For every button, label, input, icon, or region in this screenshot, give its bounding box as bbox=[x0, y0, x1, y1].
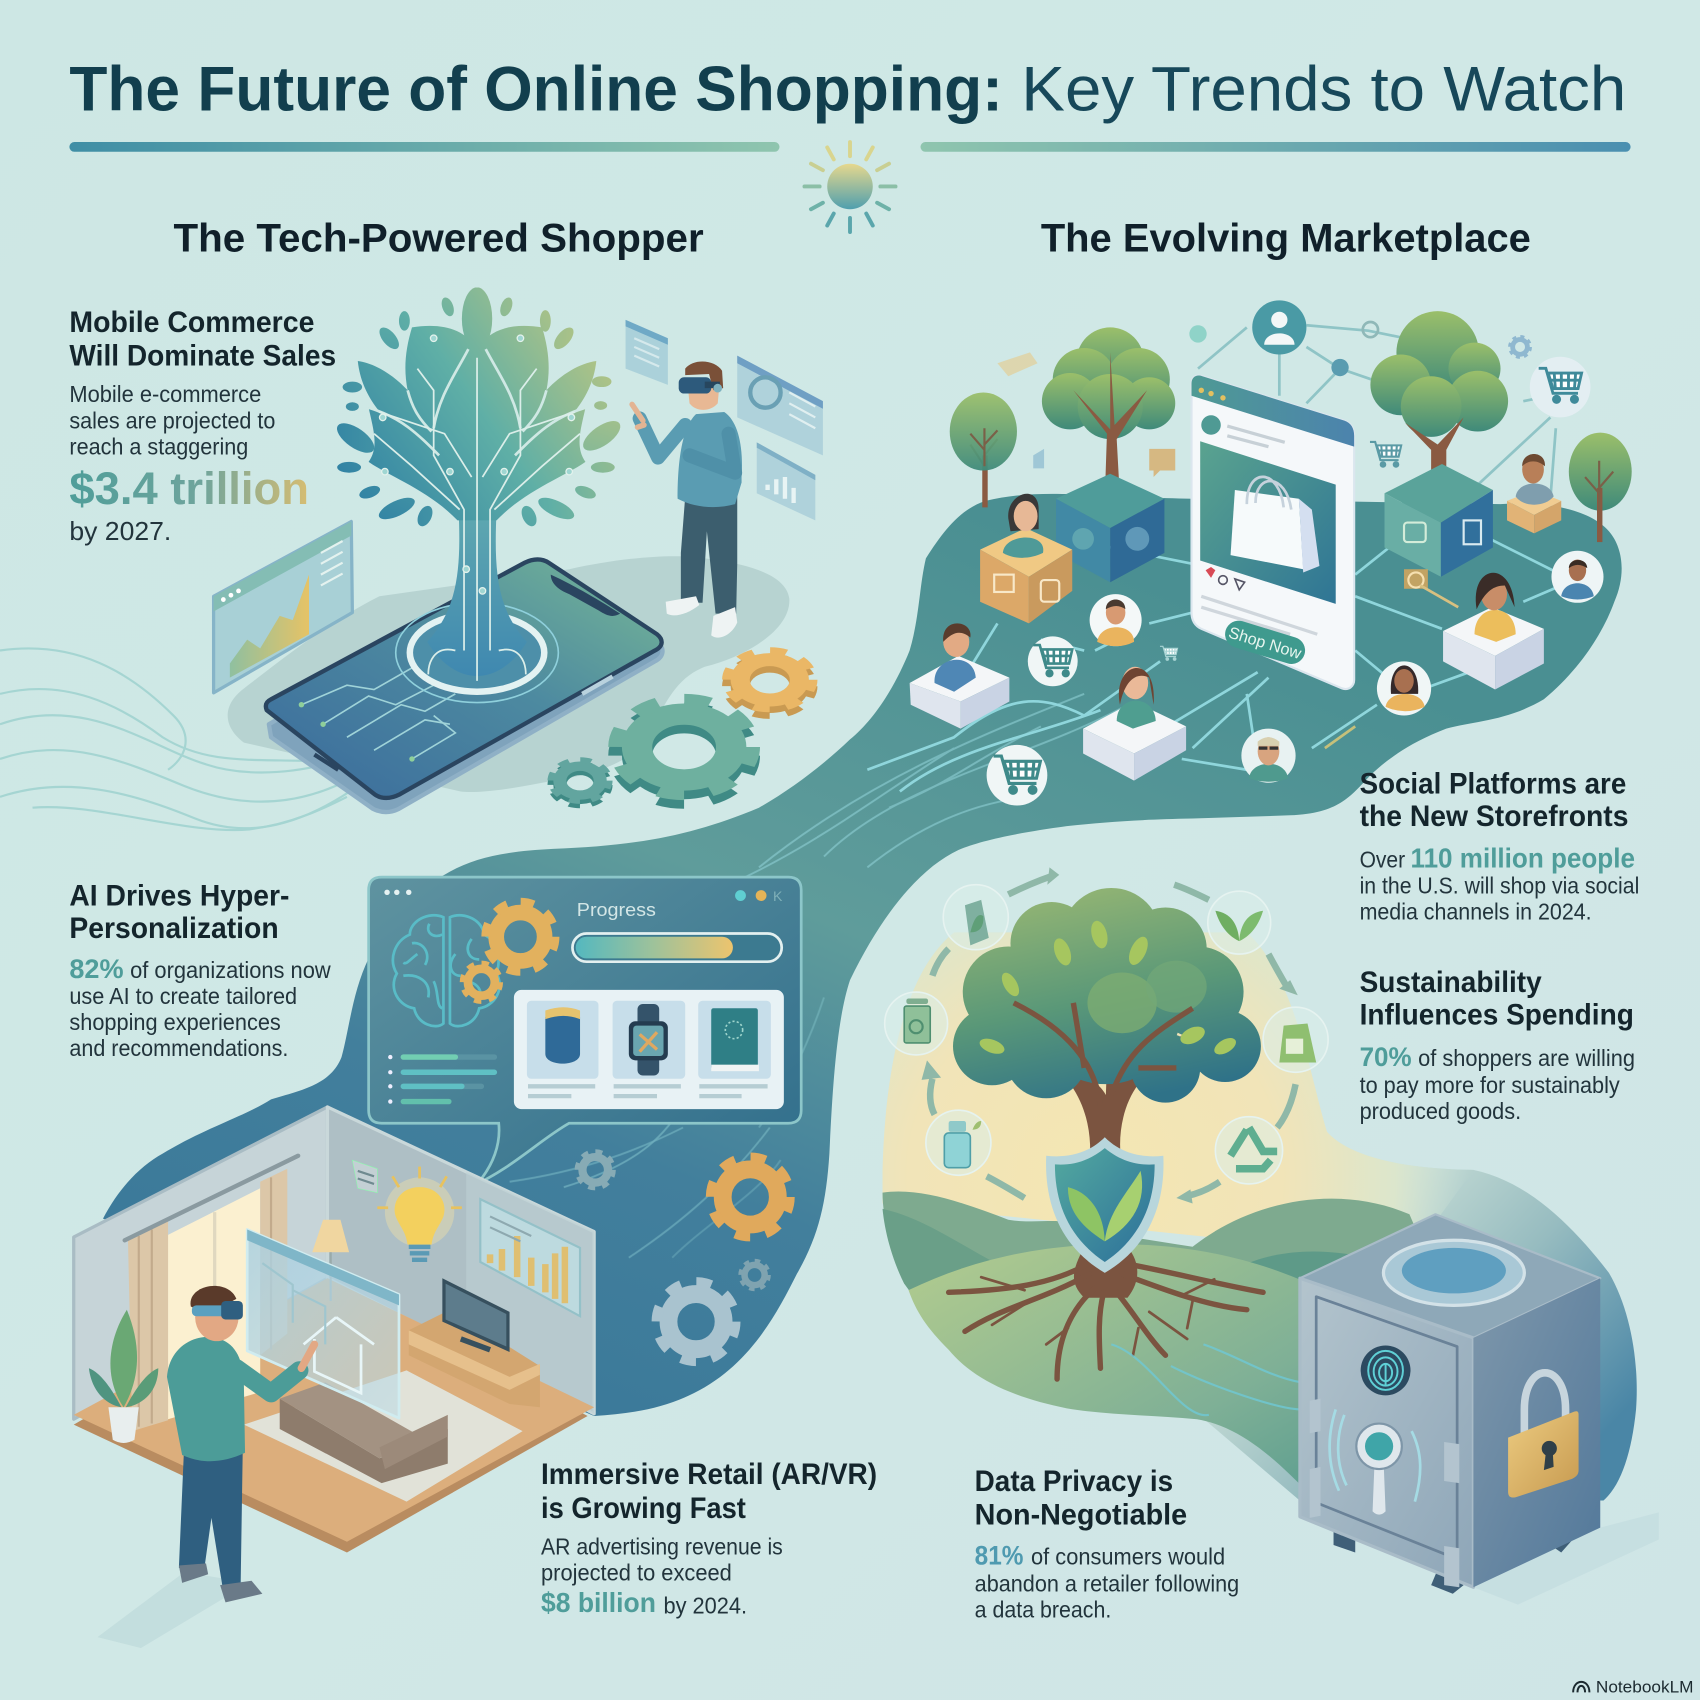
sky and hills bbox=[883, 932, 1473, 1484]
phone bbox=[266, 559, 663, 812]
text: sustainability: Influences Spending bbox=[1360, 1000, 1634, 1032]
text: ai personalization: AI Drives Hyper- bbox=[69, 880, 289, 912]
text: mobile commerce: by 2027. bbox=[69, 516, 171, 546]
text: immersive retail: AR advertising revenue is bbox=[541, 1534, 783, 1560]
tree crown bbox=[953, 888, 1261, 1106]
text: ai personalization: 82% bbox=[69, 953, 124, 984]
text: data privacy: of consumers would bbox=[1031, 1543, 1225, 1569]
illustration: secure vault bbox=[1300, 1214, 1659, 1605]
text: data privacy bbox=[975, 1466, 1239, 1623]
social post screen bbox=[1192, 376, 1354, 689]
text: data privacy: a data breach. bbox=[975, 1597, 1111, 1623]
progress label: Progress bbox=[577, 899, 656, 920]
illustration: mobile commerce bbox=[0, 287, 823, 830]
soft floor shadow bbox=[228, 556, 789, 792]
text: social platforms: Social Platforms are bbox=[1360, 769, 1626, 801]
sofa bbox=[280, 1382, 448, 1483]
illustration: living room with ar bbox=[74, 1107, 594, 1648]
text: immersive retail: projected to exceed bbox=[541, 1560, 732, 1586]
circuit ring bbox=[396, 603, 558, 703]
network lines bbox=[1198, 325, 1567, 499]
text: mobile commerce: Will Dominate Sales bbox=[69, 340, 336, 372]
text: social platforms: Over bbox=[1360, 846, 1405, 872]
text: data privacy: 81% bbox=[975, 1539, 1023, 1570]
orange block with person bbox=[980, 494, 1072, 623]
window and curtains bbox=[125, 1156, 298, 1431]
section heading: tech-powered shopper: The Tech-Powered Shopper bbox=[173, 217, 704, 261]
title divider rules bbox=[69, 142, 1631, 152]
background wave lines bbox=[0, 648, 358, 830]
text: mobile commerce: Mobile Commerce bbox=[69, 307, 314, 339]
text: social platforms: 110 million people bbox=[1411, 841, 1635, 873]
orange box with person bbox=[1507, 454, 1561, 533]
white blocks with people bbox=[910, 573, 1544, 781]
text: sustainability bbox=[1360, 967, 1635, 1124]
shield bbox=[1046, 1137, 1164, 1273]
title bbox=[69, 55, 1626, 125]
product recommendations card bbox=[514, 990, 784, 1109]
tree trunk and roots bbox=[949, 1014, 1263, 1379]
text: ai personalization: shopping experiences bbox=[69, 1009, 281, 1035]
room walls bbox=[74, 1107, 594, 1419]
floating data panels bbox=[626, 320, 823, 520]
illustration: sustainability tree landscape bbox=[883, 867, 1637, 1502]
plant bbox=[89, 1310, 158, 1443]
tree on teal block bbox=[1370, 311, 1508, 577]
text: data privacy: abandon a retailer following bbox=[975, 1571, 1239, 1597]
text: ai personalization: and recommendations. bbox=[69, 1035, 288, 1061]
section heading: evolving marketplace: The Evolving Marketplace bbox=[1041, 217, 1531, 261]
text: ai personalization bbox=[69, 880, 331, 1061]
safe top bbox=[1300, 1214, 1600, 1338]
text: social platforms: media channels in 2024. bbox=[1360, 898, 1592, 924]
safe front bbox=[1300, 1278, 1473, 1587]
text: social platforms: in the U.S. will shop via social bbox=[1360, 872, 1639, 898]
text: ai personalization: Personalization bbox=[69, 913, 279, 945]
text: immersive retail bbox=[541, 1459, 877, 1618]
circuit tree bbox=[332, 287, 625, 681]
avatars and cart icons bbox=[987, 300, 1604, 806]
wood floor bbox=[74, 1278, 594, 1553]
icon: sun bbox=[804, 142, 896, 232]
text: immersive retail: Immersive Retail (AR/VR) bbox=[541, 1459, 877, 1491]
illustration: social marketplace bbox=[867, 300, 1632, 806]
tree on block bbox=[1042, 327, 1175, 582]
tv and stand bbox=[409, 1278, 540, 1407]
text: sustainability: Sustainability bbox=[1360, 967, 1542, 999]
icon: gold gears bbox=[462, 902, 555, 1001]
person in VR headset bbox=[632, 361, 742, 638]
blue blob behind safe bbox=[1193, 1132, 1637, 1502]
button: shop now: Shop Now bbox=[1226, 624, 1304, 663]
dial bbox=[1330, 1409, 1420, 1515]
icon: brain bbox=[393, 915, 500, 1026]
blob gears bbox=[577, 1152, 789, 1361]
text: mobile commerce: Mobile e-commerce bbox=[69, 381, 261, 407]
panel: ai dashboard bbox=[369, 877, 801, 1184]
text: mobile commerce: sales are projected to bbox=[69, 407, 275, 433]
recycling cycle icons bbox=[885, 867, 1328, 1203]
text: social platforms: the New Storefronts bbox=[1360, 801, 1628, 833]
panel: ai dashboard: K bbox=[773, 888, 783, 904]
text: mobile commerce: $3.4 trillion bbox=[69, 463, 309, 514]
text: ai personalization: use AI to create tailored bbox=[69, 983, 297, 1009]
title: Key Trends to Watch bbox=[1021, 55, 1626, 125]
fiber lines bbox=[1111, 1344, 1301, 1415]
text: social platforms bbox=[1360, 769, 1639, 924]
title: The Future of Online Shopping: bbox=[69, 55, 1003, 125]
text: sustainability: of shoppers are willing bbox=[1418, 1045, 1635, 1071]
text: immersive retail: $8 billion bbox=[541, 1586, 656, 1618]
text: data privacy: Non-Negotiable bbox=[975, 1499, 1187, 1531]
crown lobe separators bbox=[369, 349, 585, 455]
text: mobile commerce bbox=[69, 307, 336, 546]
gears bbox=[551, 651, 812, 805]
teal river background shape bbox=[103, 494, 1622, 1416]
text: sustainability: to pay more for sustainably bbox=[1360, 1072, 1620, 1098]
notebooklm credit: NotebookLM bbox=[1596, 1678, 1693, 1696]
text: sustainability: 70% bbox=[1360, 1041, 1412, 1072]
text: data privacy: Data Privacy is bbox=[975, 1466, 1173, 1498]
icon: padlock bbox=[1508, 1373, 1579, 1498]
phone circuit lines bbox=[301, 668, 455, 759]
text: immersive retail: by 2024. bbox=[664, 1592, 747, 1618]
river data flow lines bbox=[510, 694, 1128, 1258]
text: sustainability: produced goods. bbox=[1360, 1098, 1521, 1124]
text: immersive retail: is Growing Fast bbox=[541, 1493, 746, 1525]
person using ar bbox=[98, 1286, 314, 1648]
floating chart panel bbox=[214, 521, 352, 693]
safe side bbox=[1473, 1278, 1600, 1587]
icon: fingerprint bbox=[1361, 1345, 1411, 1395]
glass chart panel bbox=[480, 1199, 580, 1316]
button: shop now bbox=[1222, 617, 1308, 667]
text: ai personalization: of organizations now bbox=[130, 957, 331, 983]
background trees bbox=[950, 392, 1632, 542]
text: mobile commerce: reach a staggering bbox=[69, 433, 248, 459]
list bars bbox=[388, 1055, 494, 1104]
lamp and poster bbox=[312, 1160, 377, 1301]
icon: light bulb bbox=[377, 1167, 462, 1260]
progress bar bbox=[572, 933, 782, 962]
ar glass screen bbox=[247, 1229, 399, 1418]
